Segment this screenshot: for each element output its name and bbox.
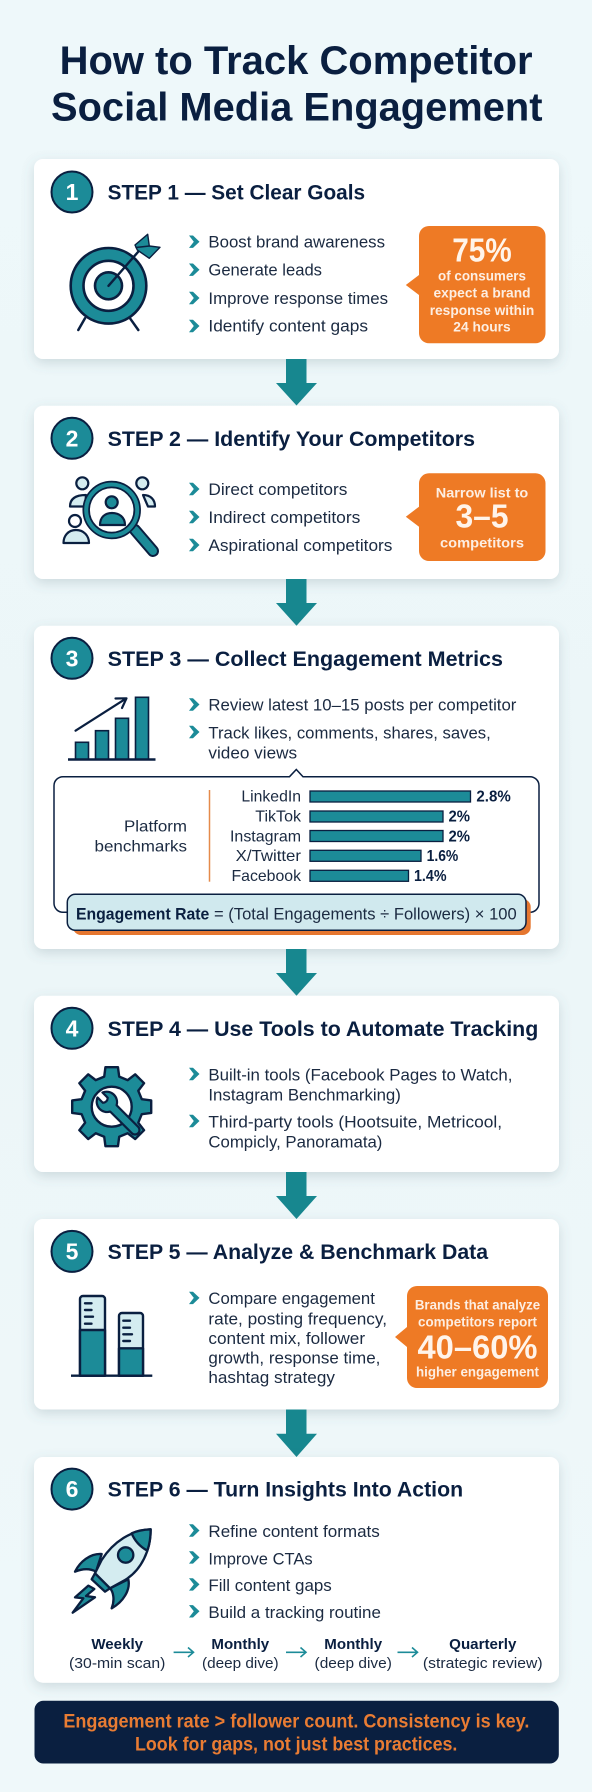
tracking routine timeline: Monthly — [211, 1636, 270, 1653]
action list: Build a tracking routine — [208, 1604, 381, 1622]
competitor types list: Direct competitors — [208, 481, 347, 499]
tracking routine timeline: (deep dive) — [315, 1655, 392, 1672]
metrics list: Track likes, comments, shares, saves, — [208, 724, 491, 742]
panel: step 6 action — [34, 1457, 559, 1683]
footer takeaway banner: Engagement rate > follower count. Consistency is key. — [63, 1712, 529, 1733]
arrow: step 1 to step 2 — [276, 359, 317, 406]
step 3 number badge: 3 — [66, 645, 78, 671]
benchmarks label: benchmarks — [94, 839, 187, 856]
action list: Refine content formats — [208, 1523, 380, 1541]
arrow: step 3 to step 4 — [276, 949, 317, 996]
benchmark bar chart: TikTok — [255, 809, 302, 826]
callout: 40-60 percent: Brands that analyze — [415, 1297, 540, 1313]
tracking routine timeline — [69, 1636, 543, 1672]
benchmark bar chart: 2.8% — [476, 789, 511, 806]
tracking routine timeline: Quarterly — [449, 1636, 517, 1653]
goals list: Improve response times — [208, 290, 388, 308]
icon: gear with wrench — [72, 1067, 151, 1146]
callout: 75 percent — [406, 226, 546, 343]
metrics list: Review latest 10–15 posts per competitor — [208, 697, 517, 715]
tracking routine timeline: (30-min scan) — [69, 1655, 165, 1672]
panel: platform benchmarks — [54, 770, 539, 912]
callout: 75 percent: 75% — [452, 232, 512, 269]
arrow: step 2 to step 3 — [276, 579, 317, 626]
step 6 heading: STEP 6 — Turn Insights Into Action — [108, 1479, 463, 1502]
step 2 number badge — [52, 418, 92, 459]
benchmark bar chart: Instagram — [230, 828, 301, 845]
icon: comparison columns — [71, 1296, 152, 1376]
panel: step 5 analyze — [34, 1219, 559, 1410]
tools list: Third-party tools (Hootsuite, Metricool, — [208, 1114, 502, 1132]
step 1 heading: STEP 1 — Set Clear Goals — [108, 182, 365, 204]
tools list: Instagram Benchmarking) — [208, 1087, 401, 1105]
title — [51, 39, 542, 130]
callout: 40-60 percent — [395, 1286, 548, 1388]
icon: target with arrow — [71, 234, 160, 330]
tracking routine timeline: Weekly — [91, 1636, 144, 1653]
action list: Improve CTAs — [208, 1550, 313, 1568]
goals list: Generate leads — [208, 262, 322, 280]
title: Social Media Engagement — [51, 86, 542, 130]
arrow: step 5 to step 6 — [276, 1410, 317, 1457]
benchmarks label — [94, 819, 187, 856]
tools list: Compicly, Panoramata) — [208, 1133, 382, 1151]
analysis list — [189, 1290, 387, 1387]
goals list: Identify content gaps — [208, 318, 368, 336]
benchmark bar chart — [230, 789, 511, 885]
benchmarks label: Platform — [124, 819, 187, 836]
callout: 75 percent: response within — [430, 302, 534, 318]
metrics list — [189, 697, 517, 762]
benchmark bar chart: LinkedIn — [241, 789, 301, 806]
metrics list: video views — [208, 744, 297, 762]
panel: step 3 collect metrics — [34, 626, 559, 949]
action list: Fill content gaps — [208, 1577, 332, 1595]
analysis list: content mix, follower — [208, 1330, 366, 1348]
callout: 75 percent: expect a brand — [434, 285, 530, 301]
benchmark bar chart: 1.6% — [427, 848, 458, 865]
icon: magnifier over people — [64, 477, 155, 551]
step 4 heading: STEP 4 — Use Tools to Automate Tracking — [108, 1018, 538, 1041]
panel: step 2 identify competitors — [34, 406, 559, 579]
step 2 number badge: 2 — [66, 425, 78, 451]
benchmark bar chart: 1.4% — [414, 868, 446, 885]
callout: 40-60 percent: higher engagement — [416, 1364, 539, 1380]
tools list — [189, 1067, 512, 1151]
benchmark bar chart: 2% — [448, 809, 470, 826]
panel: step 1 set clear goals — [34, 159, 559, 359]
goals list: Boost brand awareness — [208, 234, 385, 252]
step 4 number badge: 4 — [66, 1015, 79, 1041]
callout: 75 percent: of consumers — [438, 268, 526, 284]
step 5 heading: STEP 5 — Analyze & Benchmark Data — [108, 1241, 488, 1264]
competitor types list — [189, 481, 392, 555]
step 5 number badge: 5 — [66, 1238, 79, 1264]
divider — [208, 790, 210, 882]
benchmark bar chart: Facebook — [232, 868, 302, 885]
step 1 number badge: 1 — [66, 179, 79, 205]
step 1 number badge — [52, 172, 92, 212]
callout: 75 percent: 24 hours — [453, 319, 511, 335]
engagement rate formula — [67, 894, 531, 935]
title: How to Track Competitor — [60, 39, 533, 83]
callout: narrow list: competitors — [440, 535, 524, 551]
competitor types list: Aspirational competitors — [208, 537, 392, 555]
panel: step 4 tools — [34, 996, 559, 1172]
step 6 number badge: 6 — [66, 1476, 78, 1502]
footer takeaway banner: Look for gaps, not just best practices. — [135, 1735, 457, 1756]
step 4 number badge — [52, 1008, 92, 1049]
callout: 40-60 percent: 40–60% — [418, 1328, 538, 1365]
analysis list: rate, posting frequency, — [208, 1310, 387, 1328]
tools list: Built-in tools (Facebook Pages to Watch, — [208, 1067, 512, 1085]
engagement rate formula: Engagement Rate — [76, 905, 209, 923]
competitor types list: Indirect competitors — [208, 509, 360, 527]
callout: narrow list — [406, 473, 546, 561]
arrow: step 4 to step 5 — [276, 1172, 317, 1219]
benchmark bar chart: X/Twitter — [236, 848, 302, 865]
step 6 number badge — [52, 1469, 92, 1510]
goals list — [189, 234, 388, 336]
callout: 40-60 percent: competitors report — [418, 1313, 537, 1329]
step 2 heading: STEP 2 — Identify Your Competitors — [108, 428, 475, 451]
footer takeaway banner — [34, 1701, 559, 1764]
benchmark bar chart: 2% — [448, 828, 470, 845]
step 5 number badge — [52, 1231, 92, 1272]
tracking routine timeline: Monthly — [324, 1636, 383, 1653]
action list — [189, 1523, 381, 1622]
callout: narrow list: 3–5 — [456, 498, 508, 535]
icon: rocket — [73, 1529, 151, 1613]
icon: rising bar chart — [68, 697, 156, 760]
callout: narrow list: Narrow list to — [436, 484, 528, 500]
step 3 number badge — [52, 638, 92, 679]
analysis list: growth, response time, — [208, 1350, 380, 1368]
analysis list: hashtag strategy — [208, 1369, 336, 1387]
step 3 heading: STEP 3 — Collect Engagement Metrics — [108, 648, 503, 671]
analysis list: Compare engagement — [208, 1290, 375, 1308]
tracking routine timeline: (strategic review) — [423, 1655, 543, 1672]
tracking routine timeline: (deep dive) — [202, 1655, 279, 1672]
engagement rate formula: = (Total Engagements ÷ Followers) × 100 — [214, 905, 517, 923]
